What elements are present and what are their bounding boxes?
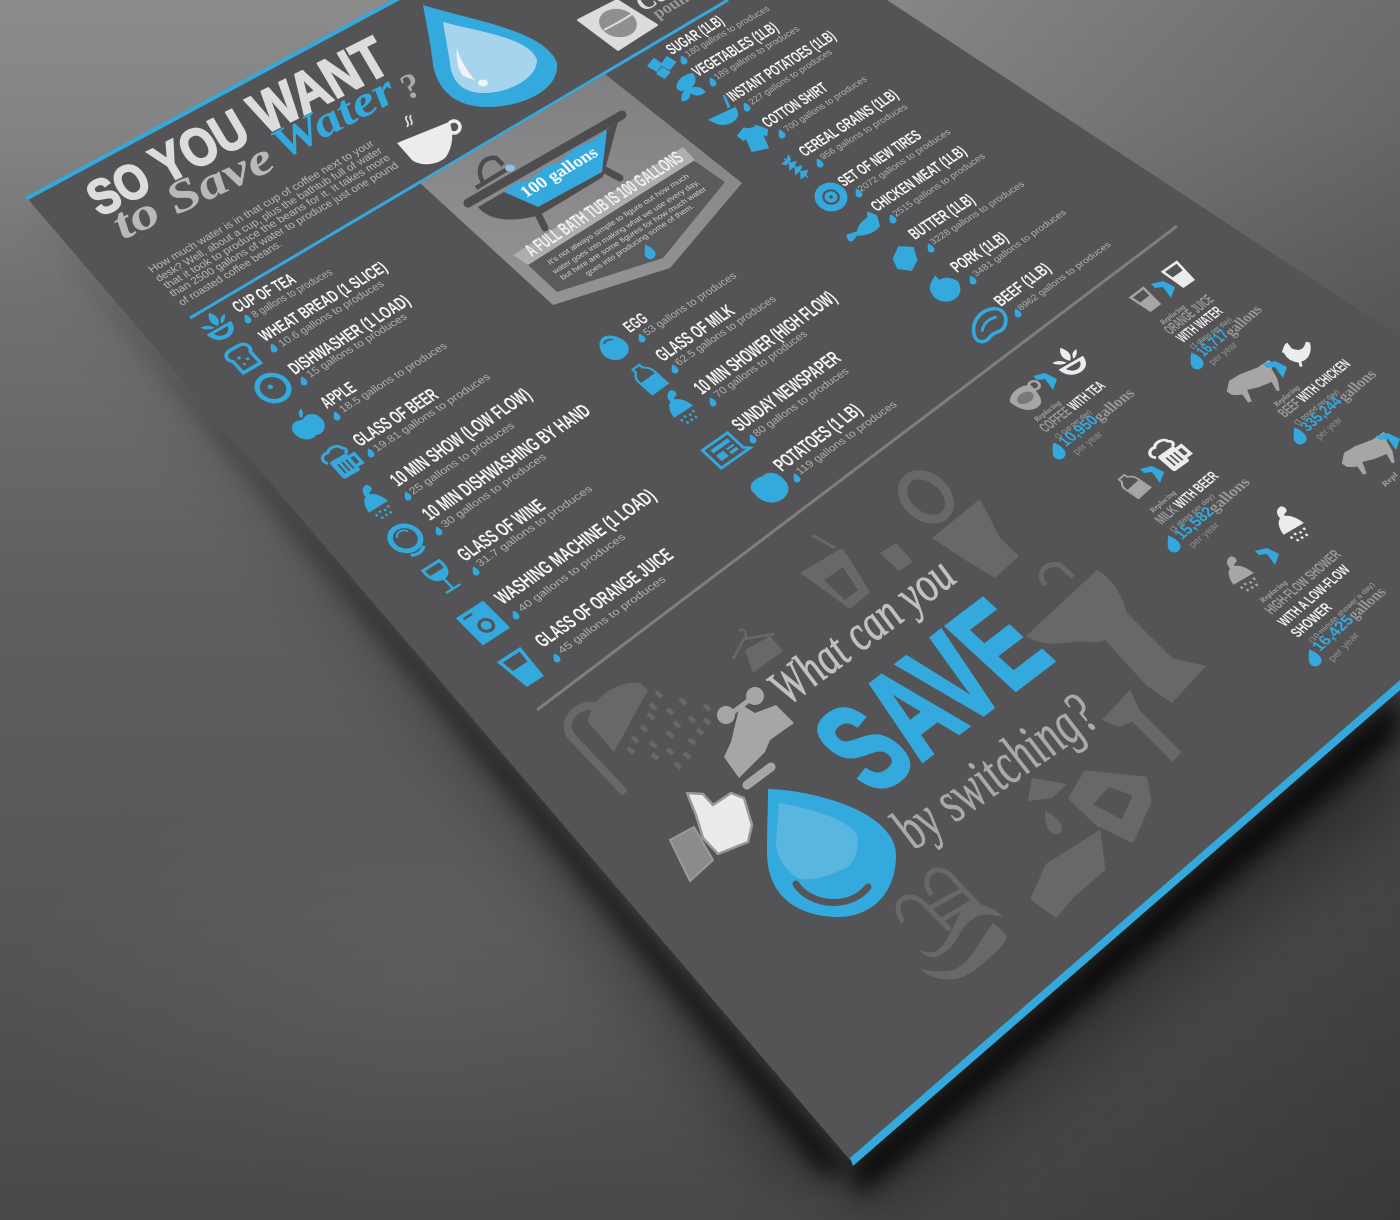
item: high flow shower bbox=[656, 288, 842, 427]
background icons: household water uses bbox=[568, 466, 1206, 980]
item: cereal grains bbox=[780, 87, 910, 182]
heading word water: Water bbox=[261, 66, 406, 168]
swap: cropped cow at right edge: Repl bbox=[1378, 471, 1400, 489]
item: wheat bread bbox=[223, 258, 391, 374]
item: pork bbox=[926, 208, 1069, 304]
heading: save: SAVE bbox=[785, 575, 1078, 817]
swap: orange juice with water bbox=[1131, 262, 1266, 370]
icon: plunger bbox=[1102, 690, 1177, 757]
swap: high flow with low flow shower: gallons bbox=[1343, 584, 1390, 622]
swap: beef with chicken: 335,244 bbox=[1296, 394, 1346, 434]
item: cup of tea: 8 gallons to produces bbox=[249, 267, 335, 320]
item: washing machine bbox=[456, 486, 661, 645]
swap: beef with chicken: Replacing bbox=[1271, 384, 1302, 409]
item: high flow shower: 10 MIN SHOWER (HIGH FLOW) bbox=[689, 288, 842, 398]
swap: milk with beer: MILK WITH BEER bbox=[1151, 469, 1223, 527]
item: glass of wine: GLASS OF WINE bbox=[453, 496, 550, 566]
panel banner bbox=[513, 147, 695, 265]
item: pork: 3481 gallons to produces bbox=[970, 208, 1069, 278]
callout text: goes into producing some of them. bbox=[583, 202, 696, 277]
swap: orange juice with water: gallons bbox=[1220, 302, 1266, 339]
swap: coffee with tea: 10,950 bbox=[1055, 412, 1102, 449]
swap: milk with beer: (1 glass per day) bbox=[1167, 492, 1217, 533]
icon: hand bbox=[1032, 832, 1104, 916]
panel: bath tub callout bbox=[420, 74, 742, 305]
heading question mark: ? bbox=[392, 65, 429, 107]
swap: beef with chicken: (1 pound per day) bbox=[1291, 387, 1342, 426]
icon: takeaway cup bbox=[800, 535, 870, 609]
swap: high flow with low flow shower: (10-minute shower a day) bbox=[1306, 581, 1377, 644]
item: glass of milk: 62.5 gallons to produces bbox=[672, 294, 779, 368]
icon: faucet bbox=[717, 687, 794, 785]
icon: shower head bbox=[568, 683, 710, 793]
heading line 1: SO YOU WANT bbox=[73, 25, 400, 228]
item: new tires bbox=[808, 127, 953, 217]
item: butter: BUTTER (1LB) bbox=[904, 190, 979, 243]
item: potatoes: POTATOES (1 LB) bbox=[769, 401, 867, 475]
item: washing machine: WASHING MACHINE (1 LOAD) bbox=[490, 486, 661, 608]
swap: orange juice with water: Replacing bbox=[1157, 303, 1188, 327]
item: dishwashing by hand: 10 MIN DISHWASHING BY HAND bbox=[418, 401, 596, 525]
icon: small soap bbox=[880, 543, 913, 571]
faucet bbox=[476, 158, 512, 188]
swap: milk with beer: gallons bbox=[1204, 474, 1254, 515]
rule under intro bbox=[190, 0, 728, 318]
blue bottom edge bbox=[850, 680, 1400, 1166]
item: beef: BEEF (1LB) bbox=[989, 259, 1055, 310]
swap: milk with beer: 15,582 bbox=[1171, 504, 1218, 542]
item: sunday newspaper: 80 gallons to produces bbox=[750, 366, 852, 439]
swap: high flow with low flow shower: WITH A LOW-FLOW bbox=[1274, 562, 1354, 629]
item: dishwasher: DISHWASHER (1 LOAD) bbox=[284, 291, 414, 378]
swap: coffee with tea bbox=[1005, 342, 1139, 460]
item: cotton shirt: 700 gallons to produces bbox=[781, 74, 870, 133]
swap: high flow with low flow shower: per year bbox=[1326, 630, 1363, 664]
swap: coffee with tea: per year bbox=[1071, 429, 1106, 457]
item: cotton shirt bbox=[734, 74, 870, 153]
item: vegetables bbox=[673, 19, 802, 102]
tub label: 100 gallons bbox=[516, 144, 602, 201]
intro paragraph: How much water is in that cup of coffee next to your bbox=[146, 138, 377, 275]
item: egg: 53 gallons to produces bbox=[641, 270, 740, 338]
swap: coffee with tea: COFFEE WITH TEA bbox=[1036, 379, 1109, 436]
icon: toilet bbox=[894, 466, 1019, 578]
swap: cropped cow at right edge bbox=[1333, 431, 1400, 489]
item: dishwasher: 15 gallons to produces bbox=[304, 311, 410, 380]
swap: beef with chicken: gallons bbox=[1334, 367, 1380, 404]
item: glass of wine: 31.7 gallons to produces bbox=[473, 484, 595, 569]
callout text: but here are some figures for how much water bbox=[558, 185, 709, 281]
item: potatoes: 119 gallons to produces bbox=[793, 399, 900, 477]
intro paragraph bbox=[146, 138, 401, 308]
item: egg bbox=[592, 270, 740, 365]
item: dishwashing by hand bbox=[384, 401, 596, 560]
swap: beef with chicken bbox=[1218, 337, 1380, 445]
swap: orange juice with water: 16,717 bbox=[1193, 327, 1233, 359]
item: chicken meat: 2515 gallons to produces bbox=[890, 151, 988, 218]
swap: orange juice with water: WITH WATER bbox=[1173, 304, 1227, 346]
panel body bbox=[528, 160, 725, 292]
item: apple bbox=[282, 340, 450, 444]
icon: thumbs up bbox=[670, 793, 752, 881]
item: glass of milk bbox=[628, 294, 779, 394]
item: dishwashing by hand: 30 gallons to produces bbox=[438, 452, 549, 530]
item: low flow shower bbox=[351, 385, 536, 522]
swap: orange juice with water: per year bbox=[1207, 340, 1241, 367]
item: new tires: 2072 gallons to produces bbox=[855, 127, 953, 193]
heading line 2: to Save bbox=[102, 132, 283, 249]
icon: hanger bbox=[733, 630, 783, 673]
swap: high flow with low flow shower: 16,425 bbox=[1308, 612, 1358, 654]
icon: bathtub bbox=[468, 115, 622, 228]
swap: high flow with low flow shower: SHOWER bbox=[1287, 600, 1336, 640]
item: glass of beer bbox=[318, 371, 493, 481]
item: wheat bread: 10.6 gallons to produces bbox=[276, 279, 387, 349]
item: orange juice: 45 gallons to produces bbox=[555, 574, 669, 656]
item: glass of beer: GLASS OF BEER bbox=[349, 386, 443, 451]
icon: big water drop bbox=[423, 5, 557, 107]
item: chicken meat: CHICKEN MEAT (1LB) bbox=[867, 143, 970, 215]
swap: beef with chicken: BEEF WITH CHICKEN bbox=[1274, 357, 1354, 420]
item: high flow shower: 70 gallons to produces bbox=[711, 329, 810, 400]
swap: milk with beer: Replacing bbox=[1147, 489, 1178, 515]
panel: switching savings bbox=[1005, 262, 1400, 667]
item: low flow shower: 25 gallons to produces bbox=[406, 420, 518, 497]
icon: small drop bbox=[645, 245, 656, 259]
swap: orange juice with water: ORANGE JUICE bbox=[1161, 292, 1218, 337]
item: egg: EGG bbox=[619, 309, 652, 336]
icon: sink bbox=[1026, 564, 1206, 703]
item: beef bbox=[967, 239, 1114, 343]
intro paragraph: than 2500 gallons of water to produce just one pound bbox=[167, 160, 401, 299]
item: dishwasher bbox=[251, 291, 414, 406]
blue top edge bbox=[25, 0, 400, 200]
icon: coffee bean bag bbox=[578, 0, 657, 50]
rule above savings section bbox=[537, 226, 1177, 710]
item: glass of milk: GLASS OF MILK bbox=[651, 302, 740, 366]
column: third list bbox=[647, 4, 1114, 343]
item: washing machine: 40 gallons to produces bbox=[515, 532, 629, 614]
item: apple: APPLE bbox=[316, 378, 360, 412]
item: sugar: 180 gallons to produces bbox=[683, 4, 772, 59]
swap: milk with beer: per year bbox=[1186, 520, 1223, 550]
item: glass of beer: 19.81 gallons to produces bbox=[371, 371, 493, 454]
swap: high flow with low flow shower bbox=[1215, 504, 1390, 667]
swap: coffee with tea: (1 cup per day) bbox=[1052, 408, 1094, 440]
swap: coffee with tea: gallons bbox=[1089, 386, 1139, 424]
title bbox=[73, 25, 429, 249]
heading: by switching: by switching? bbox=[876, 681, 1113, 860]
swap: high flow with low flow shower: HIGH-FLOW SHOWER bbox=[1261, 547, 1345, 617]
intro paragraph: of roasted coffee beans. bbox=[176, 239, 285, 308]
tub water bbox=[504, 130, 607, 207]
icon: pool ladder with waves bbox=[898, 870, 1007, 980]
column: first list bbox=[194, 258, 678, 687]
swap: high flow with low flow shower: Replacing bbox=[1257, 579, 1290, 605]
savings heading bbox=[756, 547, 1113, 860]
item: sunday newspaper: SUNDAY NEWSPAPER bbox=[727, 348, 846, 435]
swap: beef with chicken: per year bbox=[1313, 415, 1346, 442]
item: sunday newspaper bbox=[702, 348, 852, 468]
icon: coffee cup bbox=[397, 115, 460, 164]
item: cotton shirt: COTTON SHIRT bbox=[758, 80, 832, 131]
item: chicken meat bbox=[839, 143, 988, 242]
item: cereal grains: CEREAL GRAINS (1LB) bbox=[795, 87, 902, 160]
item: sugar bbox=[647, 4, 772, 80]
item: cup of tea bbox=[194, 267, 335, 345]
item: orange juice bbox=[500, 545, 678, 687]
icon: smiling water drop bbox=[767, 789, 896, 917]
icon: falling soap drop bbox=[1045, 811, 1062, 834]
intro paragraph: desk? Well, about a cup, plus the bathtub full of water bbox=[153, 145, 386, 284]
heading: what can you: What can you bbox=[756, 547, 967, 715]
swap: coffee with tea: Replacing bbox=[1031, 399, 1063, 424]
icon: spray nozzle bbox=[1028, 778, 1067, 801]
swap: orange juice with water: (1 glass per day) bbox=[1188, 315, 1235, 350]
item: instant potatoes: 227 gallons to produces bbox=[746, 47, 835, 106]
item: pork: PORK (1LB) bbox=[946, 228, 1012, 276]
item: beef: 8962 gallons to produces bbox=[1015, 239, 1114, 312]
item: new tires: SET OF NEW TIRES bbox=[834, 127, 926, 190]
banner text: A FULL BATH TUB IS 100 GALLONS bbox=[521, 148, 688, 261]
item: orange juice: GLASS OF ORANGE JUICE bbox=[531, 545, 678, 651]
item: potatoes bbox=[746, 399, 900, 508]
item: low flow shower: 10 MIN SHOW (LOW FLOW) bbox=[386, 385, 536, 491]
swap: milk with beer bbox=[1115, 435, 1254, 553]
item: instant potatoes bbox=[698, 28, 840, 130]
callout text bbox=[545, 172, 709, 281]
intro paragraph: that it took to produce the beans for it. It takes more bbox=[161, 152, 393, 291]
item: apple: 18.5 gallons to produces bbox=[337, 340, 450, 415]
item: wheat bread: WHEAT BREAD (1 SLICE) bbox=[254, 258, 391, 345]
callout text: water goes into making what we use every day, bbox=[549, 178, 701, 276]
item: glass of wine bbox=[423, 484, 595, 595]
item: butter bbox=[889, 179, 1027, 274]
item: vegetables: 189 gallons to produces bbox=[711, 24, 802, 81]
item: butter: 3228 gallons to produces bbox=[927, 179, 1027, 246]
item: cereal grains: 956 gallons to produces bbox=[817, 102, 910, 161]
icon: detergent bottle bbox=[1071, 773, 1149, 840]
item: cup of tea: CUP OF TEA bbox=[228, 269, 300, 316]
column: second list bbox=[592, 270, 900, 508]
callout text: It's not always simple to figure out how much bbox=[545, 172, 691, 266]
